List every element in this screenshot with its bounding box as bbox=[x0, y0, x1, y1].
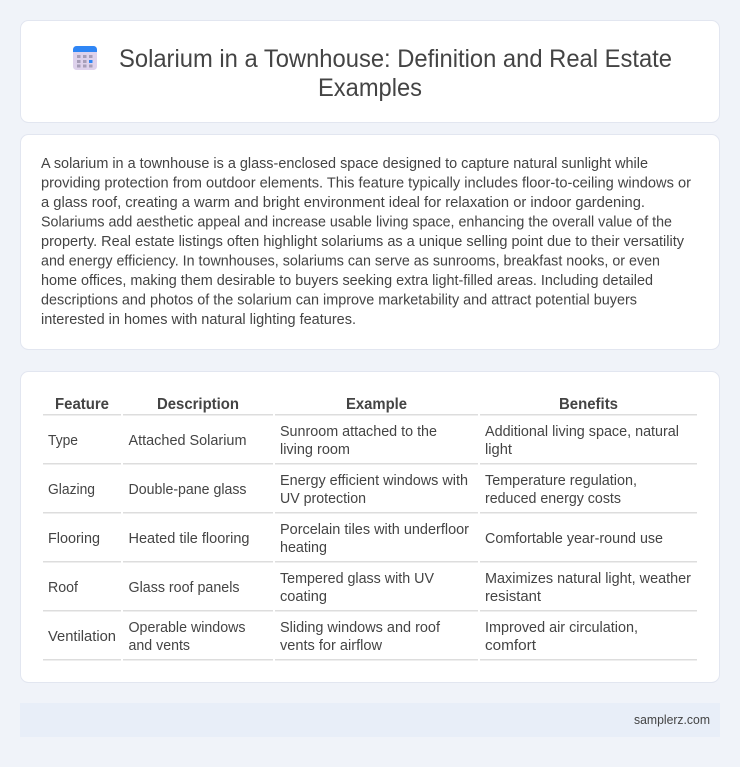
table header row bbox=[55, 396, 618, 413]
table row: glazing: Temperature regulation, bbox=[485, 473, 637, 489]
table row: roof: Glass roof panels bbox=[128, 580, 240, 596]
panel: title card bbox=[20, 20, 720, 122]
text block: description: home offices, making them desirable to buyers seeking extra light-filled areas. Including detailed bbox=[41, 273, 653, 289]
icon: calendar bbox=[73, 46, 97, 70]
panel: feature table bbox=[20, 372, 720, 682]
title: Examples bbox=[318, 74, 422, 102]
table row: type: Additional living space, natural bbox=[485, 424, 679, 440]
table row: flooring: heating bbox=[280, 540, 327, 556]
table row: type: Sunroom attached to the bbox=[280, 424, 437, 440]
table header row: Example bbox=[346, 396, 407, 413]
table row: ventilation: Sliding windows and roof bbox=[280, 620, 441, 636]
table header row: Benefits bbox=[559, 396, 618, 413]
text block: description: Solariums add aesthetic appeal and increase usable living space, enhancing the overall value of the bbox=[41, 214, 672, 230]
table row: type: Type bbox=[48, 433, 78, 449]
table row: ventilation: Ventilation bbox=[48, 629, 116, 645]
text block: description: a glass roof, creating a warm and bright environment ideal for relaxation or indoor gardening. bbox=[41, 195, 645, 211]
table row: glazing: UV protection bbox=[280, 491, 366, 507]
table row: roof: Maximizes natural light, weather bbox=[485, 571, 691, 587]
table row: ventilation: and vents bbox=[128, 638, 190, 654]
table row: flooring: Heated tile flooring bbox=[128, 531, 250, 547]
table row: glazing: Energy efficient windows with bbox=[280, 473, 468, 489]
text block: description: and energy efficiency. In townhouses, solariums can serve as sunrooms, breakfast nooks, or even bbox=[41, 254, 660, 270]
table row: glazing: Glazing bbox=[48, 482, 95, 498]
text block: description: A solarium in a townhouse is a glass-enclosed space designed to capture natural sunlight while bbox=[41, 156, 648, 172]
table row: roof: resistant bbox=[485, 589, 541, 605]
footer bar bbox=[20, 703, 720, 737]
title bbox=[119, 45, 672, 102]
table row: glazing: Double-pane glass bbox=[128, 482, 246, 498]
panel: intro paragraph bbox=[20, 134, 720, 350]
table row: roof: coating bbox=[280, 589, 327, 605]
text block: description: providing protection from outdoor elements. This feature typically includes floor-to-ceiling windows or bbox=[41, 176, 691, 192]
table row: type bbox=[48, 424, 679, 458]
text block: description bbox=[41, 156, 691, 328]
title: Solarium in a Townhouse: Definition and Real Estate bbox=[119, 45, 672, 73]
text block: description: property. Real estate listings often highlight solariums as a unique selling point due to their versatility bbox=[41, 234, 685, 250]
table row: ventilation: Improved air circulation, bbox=[485, 620, 638, 636]
table row: roof bbox=[48, 571, 691, 605]
table header row: Description bbox=[157, 396, 239, 413]
table header row: Feature bbox=[55, 396, 109, 413]
table row: ventilation bbox=[48, 620, 638, 654]
table row: glazing bbox=[48, 473, 637, 507]
table row: ventilation: vents for airflow bbox=[280, 638, 383, 654]
table row: flooring: Flooring bbox=[48, 531, 100, 547]
table row: flooring: Comfortable year-round use bbox=[485, 531, 663, 547]
table row: flooring bbox=[48, 522, 663, 556]
text block: description: descriptions and photos of the solarium can improve marketability and attract potential buyers bbox=[41, 292, 637, 308]
table row: roof: Tempered glass with UV bbox=[280, 571, 434, 587]
table row: type: Attached Solarium bbox=[128, 433, 247, 449]
table row: type: light bbox=[485, 442, 512, 458]
table row: roof: Roof bbox=[48, 580, 79, 596]
table row: ventilation: comfort bbox=[485, 638, 536, 654]
table row: type: living room bbox=[280, 442, 350, 458]
table row: flooring: Porcelain tiles with underfloor bbox=[280, 522, 469, 538]
table row: ventilation: Operable windows bbox=[128, 620, 246, 636]
footer text: source: samplerz.com bbox=[634, 713, 710, 727]
table row: glazing: reduced energy costs bbox=[485, 491, 621, 507]
text block: description: interested in homes with natural lighting features. bbox=[41, 312, 356, 328]
